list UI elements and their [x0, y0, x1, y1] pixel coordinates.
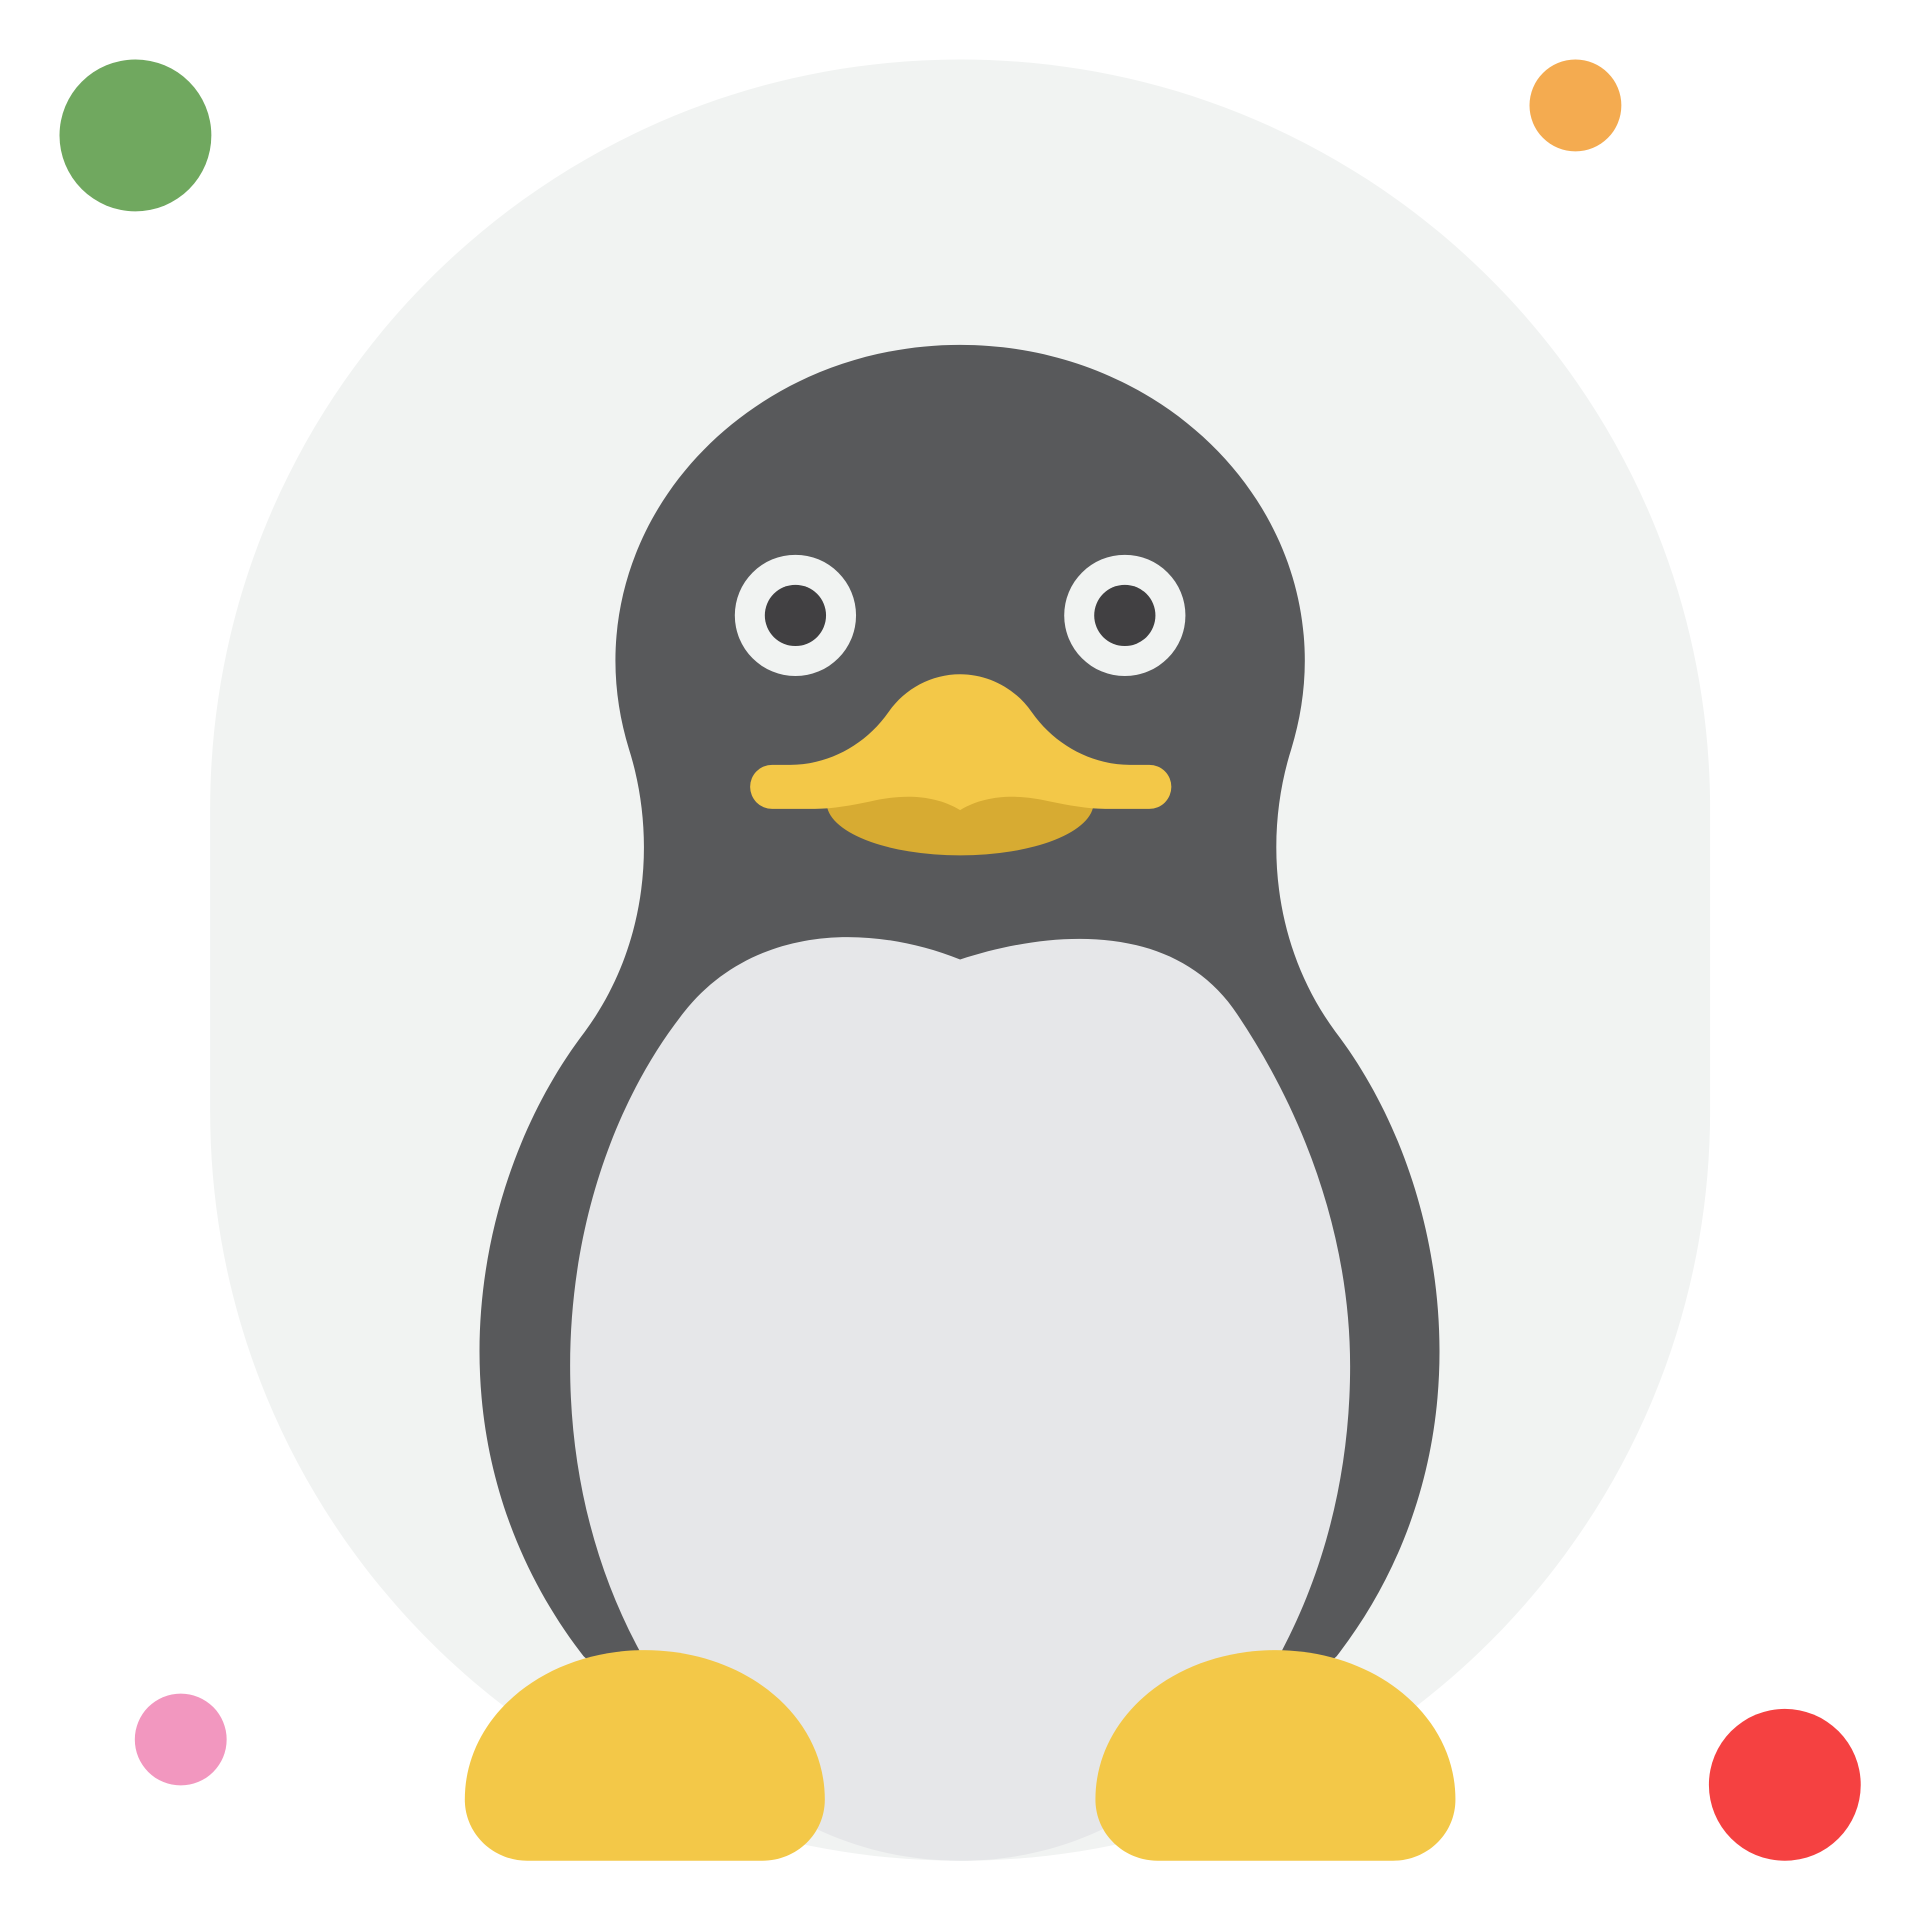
- icon: pink dot: [135, 1694, 227, 1785]
- icon: left eye: [735, 555, 856, 676]
- icon: right eye: [1064, 555, 1185, 676]
- icon: green dot: [60, 60, 211, 211]
- penguin body and head: [480, 345, 1440, 1715]
- upper beak: [750, 674, 1171, 810]
- icon: red dot: [1709, 1709, 1861, 1861]
- penguin figure: [465, 345, 1455, 1861]
- penguin belly: [570, 937, 1350, 1861]
- icon: orange dot: [1530, 60, 1621, 151]
- lower beak: [827, 750, 1094, 855]
- left foot: [465, 1650, 825, 1861]
- right foot: [1095, 1650, 1455, 1861]
- panel: background arch shape: [210, 60, 1710, 1861]
